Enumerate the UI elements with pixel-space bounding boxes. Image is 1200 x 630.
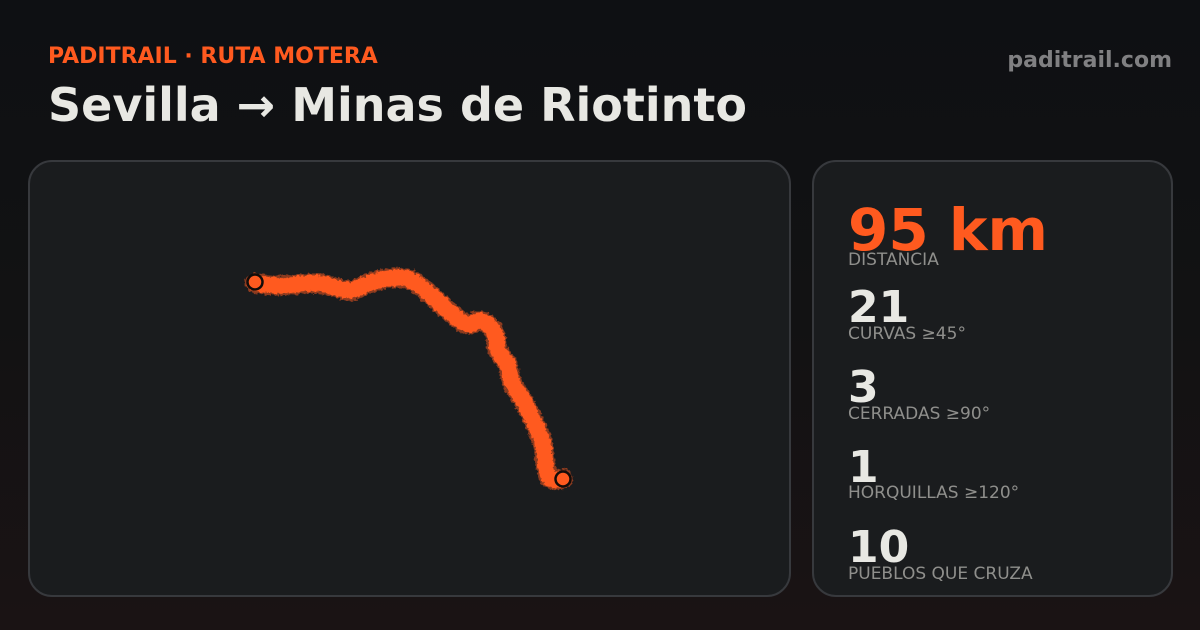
stat value: hairpins: 1: [848, 442, 879, 493]
stat value: towns: 10: [848, 522, 909, 573]
stat label: tight bends: CERRADAS ≥90°: [848, 404, 990, 424]
panel: route map: [28, 160, 791, 597]
stat value: distance: 95 km: [848, 196, 1048, 264]
title: Sevilla → Minas de Riotinto: [48, 78, 747, 132]
stat label: curves: CURVAS ≥45°: [848, 324, 966, 344]
route line: [255, 277, 563, 480]
stat label: hairpins: HORQUILLAS ≥120°: [848, 483, 1019, 503]
stat value: tight bends: 3: [848, 362, 879, 413]
start marker: [248, 274, 262, 290]
panel: stats: [812, 160, 1173, 597]
stat label: towns: PUEBLOS QUE CRUZA: [848, 564, 1033, 584]
stat label: distance: DISTANCIA: [848, 250, 939, 270]
brand: paditrail.com: paditrail.com: [1007, 48, 1172, 73]
stat value: curves: 21: [848, 282, 909, 333]
eyebrow heading: PADITRAIL · RUTA MOTERA: [48, 44, 378, 69]
end marker: [556, 472, 570, 486]
